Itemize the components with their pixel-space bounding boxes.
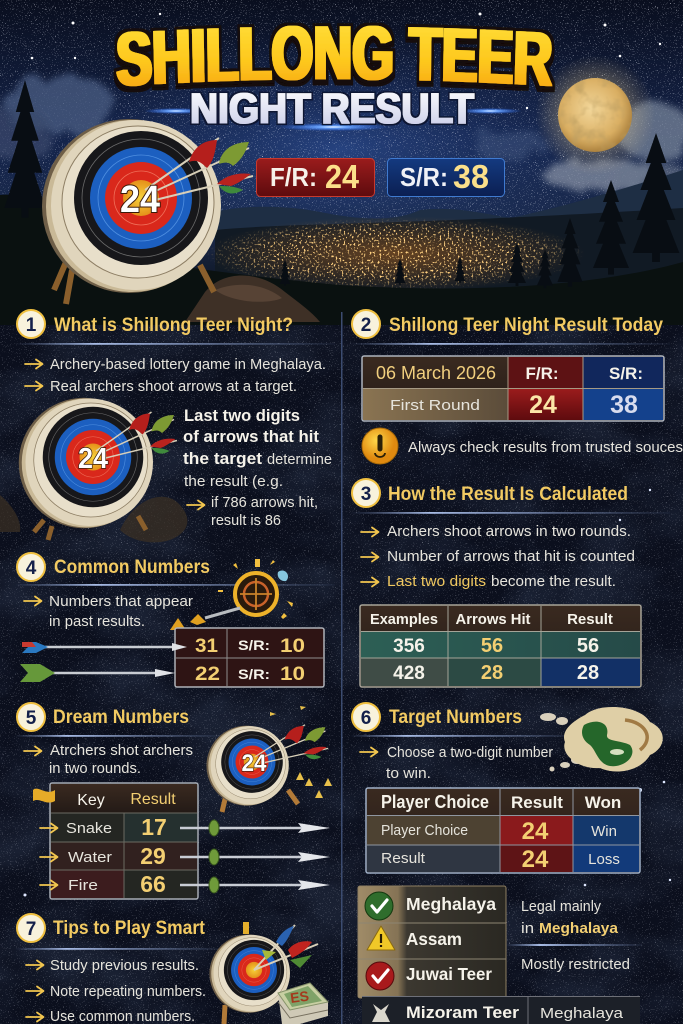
subtitle: Night Result: NIGHT RESULT [190,85,474,133]
panel: how result is calculated [350,479,670,687]
callout: trusted sources: Always check results from trusted souces [408,439,683,456]
table: examples: 28 [577,662,599,684]
table: player choice: Player Choice [381,792,489,812]
bullet text: Numbers that appear [49,593,193,610]
section 6 heading [350,703,575,737]
table: common numbers: S/R: [238,637,270,653]
table: dream numbers: Fire [68,877,98,894]
icon: arrow green [20,664,175,682]
hero: night landscape scene [0,0,683,325]
table: dream numbers: Result [130,791,176,808]
legal note: in [521,920,534,937]
explanation text: of arrows that hit [183,428,320,446]
icon: target with sparkles: 24 [242,750,267,777]
badge: first round result [256,158,374,196]
section 4 heading [15,553,335,586]
table: common numbers [175,628,324,687]
icon: hero target with arrows [42,119,253,304]
bullet text: in past results. [49,613,145,630]
city lights [200,210,590,300]
icon: gold flag [33,789,55,803]
table: examples: 28 [481,662,503,684]
bullet text [360,744,553,782]
section 4 heading: 4 [26,558,37,579]
icon: hero target with arrows: 24 [120,179,160,221]
table: examples: Examples [370,611,438,628]
bullet text: in two rounds. [49,760,141,777]
section 2 heading: Shillong Teer Night Result Today [389,315,663,336]
section 7 heading [15,914,220,950]
section 7 heading: Tips to Play Smart [53,918,206,939]
section 6 heading: 6 [361,708,371,729]
panel: tips to play smart [15,914,328,1024]
subtitle glow lines [144,108,522,131]
section 4 heading: Common Numbers [54,557,210,578]
panel: legality by state [358,886,506,998]
bullet: Archery-based lottery game in Meghalaya. [50,356,326,373]
table: today's result: 24 [529,391,557,419]
explanation text: result is 86 [211,512,281,529]
table: examples: 56 [577,635,599,657]
table: today's result: F/R: [525,364,559,383]
table: examples: Arrows Hit [456,611,531,628]
panel: legality by state: Meghalaya [406,894,496,914]
table: examples: 56 [481,635,503,657]
icon: target with sparkles [206,706,332,812]
table: player choice: Won [585,793,621,812]
section 1 heading: 1 [26,315,37,336]
table: player choice: Loss [588,851,620,868]
table: dream numbers: Snake [66,820,112,837]
badge: second round result: 38 [453,158,489,195]
icon: check green [365,892,393,920]
arrows from table [180,820,330,893]
icon: gold bullseye [170,559,293,630]
panel: result today [350,310,683,464]
panel: what is Shillong Teer Night [0,310,335,542]
panel: legality by state: Assam [406,929,462,949]
foreground hill [0,195,683,325]
bottom row: Mizoram Teer: Mizoram Teer [406,1003,519,1022]
panel: legality by state: Juwai Teer [406,964,492,984]
table: common numbers: 10 [280,636,305,657]
table: today's result: 38 [610,391,638,419]
table: player choice [366,788,640,873]
table: today's result: First Round [390,397,480,414]
icon: check red [366,962,394,990]
table: common numbers: 10 [280,664,305,685]
table: examples: Result [567,611,613,628]
divider between columns [341,312,342,1024]
bullet: Note repeating numbers. [50,983,206,1000]
section 3 heading: How the Result Is Calculated [388,484,628,505]
table: dream numbers [40,783,198,899]
rocks [185,275,320,322]
icon: arrow red blue [22,642,187,653]
panel: common numbers [15,553,335,687]
table: examples [360,605,641,687]
section 1 heading [15,310,335,345]
bullet: Archers shoot arrows in two rounds. [387,523,631,540]
table: dream numbers: Water [68,849,112,866]
bullet: Real archers shoot arrows at a target. [50,378,297,395]
panel: target numbers [350,703,663,1024]
table: player choice: Win [591,823,617,840]
explanation text: Last two digits [184,407,300,425]
bullet [361,573,616,590]
bullet text: Atrchers shot archers [50,742,193,759]
icon: target with arrows: 24 [78,443,108,475]
legal note: Legal mainly [521,898,601,915]
legal note: Meghalaya [539,920,619,937]
table: today's result [362,356,664,421]
moon [535,55,655,175]
explanation text [183,407,332,529]
section 5 heading [15,703,220,737]
bullet text [24,742,193,777]
table: today's result: 06 March 2026 [376,363,496,383]
icon: target with arrows [209,922,318,1024]
section 6 heading: Target Numbers [389,707,522,728]
badge: first round result: F/R: [270,162,317,192]
divider [506,944,642,946]
pine trees [4,80,679,288]
icon: stack of notes [278,983,328,1024]
section 3 heading [350,479,670,514]
explanation text: if 786 arrows hit, [211,494,318,511]
table: common numbers: 31 [195,636,218,657]
table: examples: 428 [393,663,425,684]
section 7 heading: 7 [26,919,36,940]
table: today's result: S/R: [609,364,643,383]
panel: dream numbers [15,703,332,899]
badge: second round result [388,158,504,196]
clouds [0,75,683,194]
table: player choice: Result [511,793,563,812]
icon: warning [367,926,395,950]
bullet text: Choose a two-digit number [387,744,553,761]
icon: target with arrows [19,398,177,540]
explanation text: determine [267,451,332,468]
table: player choice: Result [381,850,426,867]
section 2 heading [350,310,670,345]
section 2 heading: 2 [361,315,371,336]
table: player choice: 24 [522,846,549,873]
table: examples: 356 [393,636,425,657]
bullet: Study previous results. [50,957,199,974]
icon: dream bubble [540,707,663,772]
table: player choice: 24 [522,818,549,845]
table: dream numbers: 17 [141,814,167,840]
restricted note: Mostly restricted [521,956,630,973]
section 5 heading: Dream Numbers [53,707,189,728]
bottom row: Mizoram Teer [362,996,640,1024]
callout: trusted sources [362,428,683,464]
section 3 heading: 3 [361,484,371,505]
rock under target [0,495,187,542]
bullet text: to win. [386,765,431,782]
bottom row: Mizoram Teer: Meghalaya [540,1005,624,1022]
badge: second round result: S/R: [400,162,448,192]
bullet: become the result. [491,573,616,590]
badge: first round result: 24 [325,158,360,195]
explanation text: the result (e.g. [184,473,283,490]
bullet: Last two digits [387,573,486,590]
mountains [215,170,683,290]
bullet: Number of arrows that hit is counted [387,548,635,565]
legal note [521,898,619,937]
bullet text [24,593,193,630]
table: common numbers: S/R: [238,666,270,682]
table: dream numbers: Key [77,792,105,809]
section 1 heading: What is Shillong Teer Night? [54,315,293,336]
section 5 heading: 5 [26,708,37,729]
title: Shillong Teer: SHILLONG TEER [114,22,555,92]
table: common numbers: 22 [195,664,220,685]
explanation text: the target [183,450,263,468]
table: dream numbers: 29 [140,843,166,869]
table: dream numbers: 66 [140,871,166,897]
table: player choice: Player Choice [381,822,468,839]
icon: stack of notes: ES [289,988,310,1006]
